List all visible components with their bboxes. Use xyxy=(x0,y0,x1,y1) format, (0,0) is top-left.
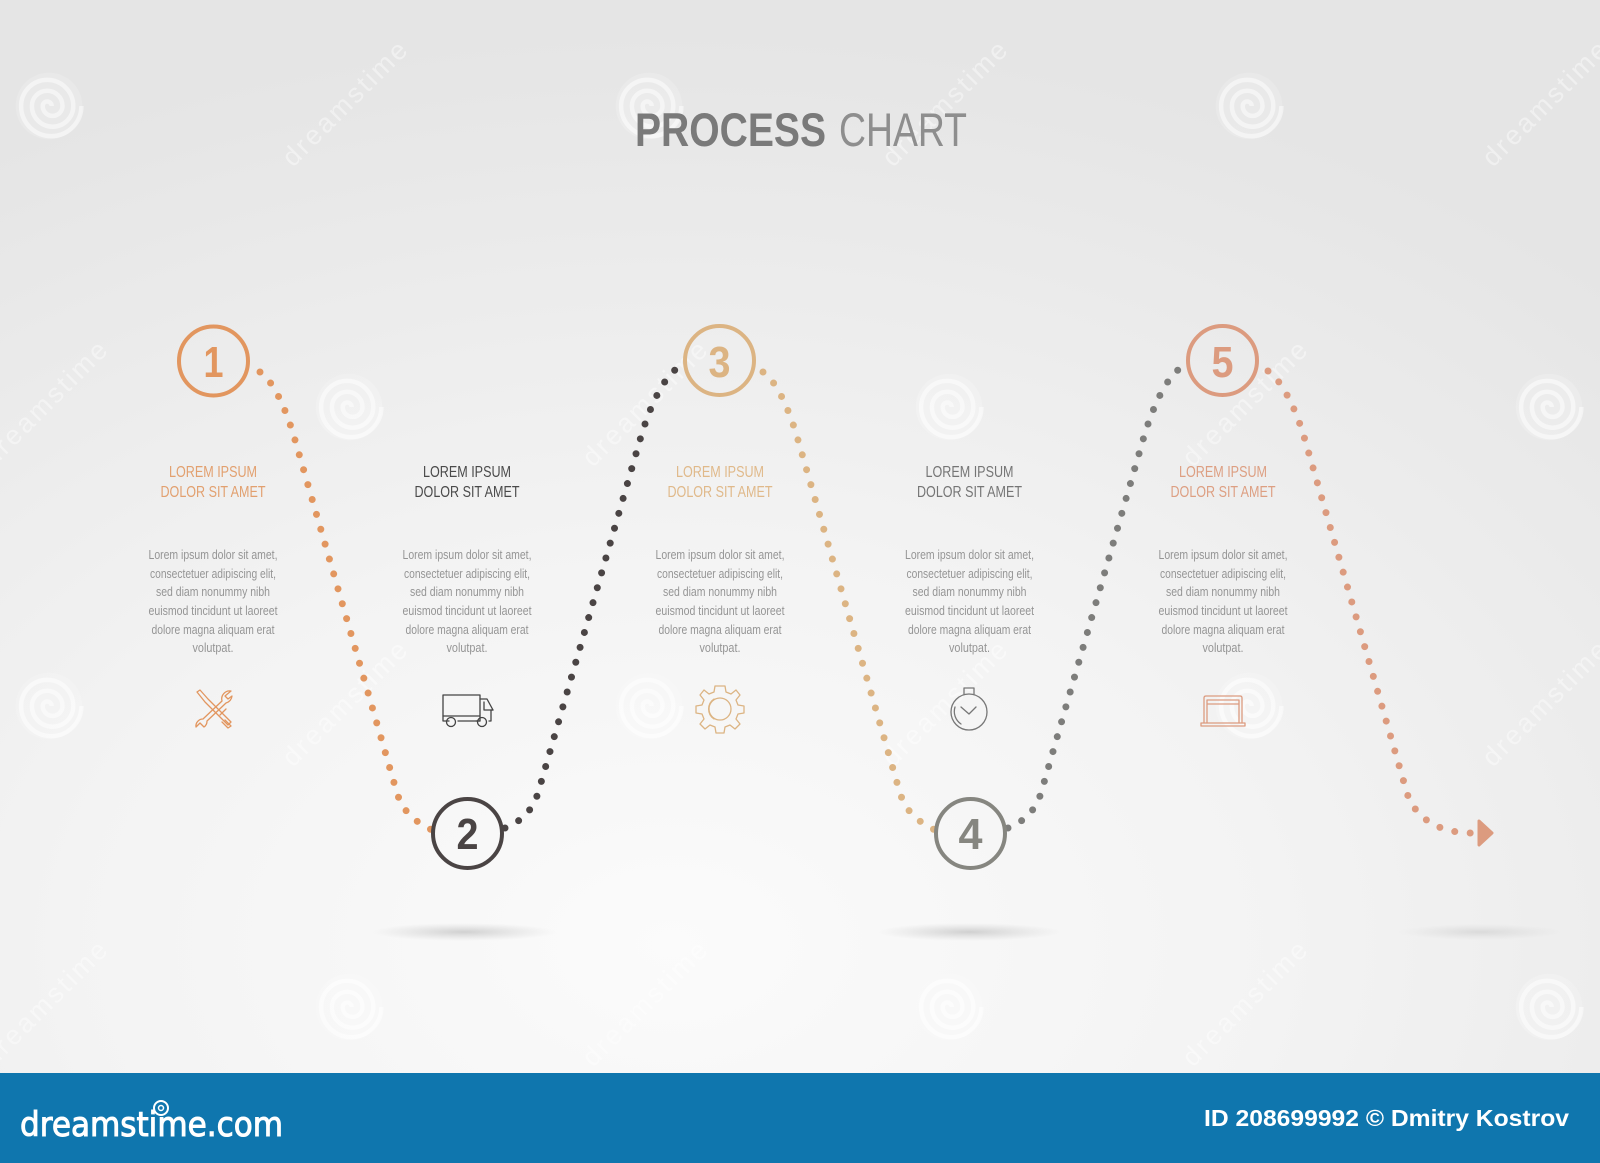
text block 5 xyxy=(1158,547,1288,655)
watermark: dreamstime xyxy=(576,934,714,1072)
number badge 4: 4 xyxy=(958,810,983,859)
text block 5: volutpat. xyxy=(1202,640,1244,655)
number badge 2: 2 xyxy=(456,810,478,859)
title xyxy=(635,103,967,156)
text block 2: euismod tincidunt ut laoreet xyxy=(402,603,532,618)
number badge 2 xyxy=(433,799,502,868)
heading 2 xyxy=(414,464,520,501)
panel: step 2 xyxy=(402,464,532,868)
heading 1 xyxy=(160,464,266,501)
title: CHART xyxy=(839,103,967,156)
number badge 5 xyxy=(1188,326,1257,395)
panel: step 5 xyxy=(1158,326,1288,726)
text block 5: sed diam nonummy nibh xyxy=(1166,584,1280,599)
icon: wrench and screwdriver xyxy=(196,690,232,728)
dotted path: step 4 to 5 xyxy=(1008,370,1178,828)
icon: laptop xyxy=(1201,696,1245,726)
text block 3: consectetuer adipiscing elit, xyxy=(657,566,783,581)
text block 1: Lorem ipsum dolor sit amet, xyxy=(148,547,278,562)
watermark: dreamstime xyxy=(1176,334,1314,472)
text block 4: euismod tincidunt ut laoreet xyxy=(905,603,1034,618)
text block 4: dolore magna aliquam erat xyxy=(908,622,1031,637)
dotted path: step 3 to 4 xyxy=(763,372,937,831)
heading 3 xyxy=(668,464,773,501)
heading 5: LOREM IPSUM xyxy=(1179,464,1267,481)
heading 3: DOLOR SIT AMET xyxy=(668,484,773,501)
text block 3: Lorem ipsum dolor sit amet, xyxy=(656,547,784,562)
watermark: dreamstime xyxy=(1176,934,1314,1072)
heading 2: LOREM IPSUM xyxy=(423,464,511,481)
number badge 4 xyxy=(936,799,1005,868)
heading 4: DOLOR SIT AMET xyxy=(917,484,1022,501)
watermark: dreamstime xyxy=(876,34,1014,172)
icon: stopwatch xyxy=(951,688,987,730)
watermark: dreamstime xyxy=(276,634,414,772)
text block 4: sed diam nonummy nibh xyxy=(912,584,1026,599)
text block 1: consectetuer adipiscing elit, xyxy=(150,566,276,581)
text block 1: sed diam nonummy nibh xyxy=(156,584,270,599)
arrow head xyxy=(1479,821,1492,845)
title: PROCESS xyxy=(635,103,826,156)
text block 4 xyxy=(905,547,1034,655)
number badge 3: 3 xyxy=(708,338,730,387)
heading 1: DOLOR SIT AMET xyxy=(160,484,266,501)
panel: step 1 xyxy=(148,326,278,728)
heading 4: LOREM IPSUM xyxy=(926,464,1014,481)
text block 2: sed diam nonummy nibh xyxy=(410,584,524,599)
text block 3: euismod tincidunt ut laoreet xyxy=(656,603,785,618)
text block 4: volutpat. xyxy=(949,640,990,655)
panel: step 3 xyxy=(656,326,785,733)
number badge 5: 5 xyxy=(1212,338,1234,387)
text block 3 xyxy=(656,547,785,655)
watermark: dreamstime xyxy=(576,334,714,472)
text block 5: dolore magna aliquam erat xyxy=(1162,622,1285,637)
text block 5: Lorem ipsum dolor sit amet, xyxy=(1158,547,1288,562)
number badge 1: 1 xyxy=(204,338,224,387)
text block 1: euismod tincidunt ut laoreet xyxy=(148,603,278,618)
number badge 3 xyxy=(685,326,754,395)
text block 5: consectetuer adipiscing elit, xyxy=(1160,566,1286,581)
icon: truck xyxy=(443,695,493,726)
text block 2: dolore magna aliquam erat xyxy=(406,622,529,637)
heading 5 xyxy=(1170,464,1276,501)
dotted path: step 2 to 3 xyxy=(505,370,675,828)
text block 3: dolore magna aliquam erat xyxy=(658,622,782,637)
watermark: dreamstime xyxy=(276,34,414,172)
text block 2 xyxy=(402,547,532,655)
text block 2: consectetuer adipiscing elit, xyxy=(404,566,530,581)
floor shadows xyxy=(372,923,1562,941)
watermark: dreamstime xyxy=(876,634,1014,772)
panel: step 4 xyxy=(905,464,1034,868)
number badge 1 xyxy=(179,326,248,396)
icon: gear xyxy=(696,686,744,733)
heading 2: DOLOR SIT AMET xyxy=(414,484,520,501)
text block 3: sed diam nonummy nibh xyxy=(663,584,777,599)
text block 3: volutpat. xyxy=(700,640,740,655)
text block 5: euismod tincidunt ut laoreet xyxy=(1158,603,1288,618)
text block 4: Lorem ipsum dolor sit amet, xyxy=(905,547,1034,562)
footer band xyxy=(0,1073,1600,1163)
heading 4 xyxy=(917,464,1022,501)
text block 4: consectetuer adipiscing elit, xyxy=(906,566,1032,581)
text block 1 xyxy=(148,547,278,655)
text block 2: Lorem ipsum dolor sit amet, xyxy=(402,547,532,562)
heading 5: DOLOR SIT AMET xyxy=(1170,484,1276,501)
dotted path: step 5 to end xyxy=(1268,371,1472,833)
heading 1: LOREM IPSUM xyxy=(169,464,257,481)
text block 1: dolore magna aliquam erat xyxy=(152,622,275,637)
heading 3: LOREM IPSUM xyxy=(676,464,764,481)
footer logo: dreamstime.com xyxy=(20,1105,283,1145)
dotted path: step 1 to 2 xyxy=(260,372,434,831)
text block 2: volutpat. xyxy=(446,640,488,655)
footer credit: ID 208699992 © Dmitry Kostrov xyxy=(1204,1105,1569,1131)
text block 1: volutpat. xyxy=(192,640,234,655)
